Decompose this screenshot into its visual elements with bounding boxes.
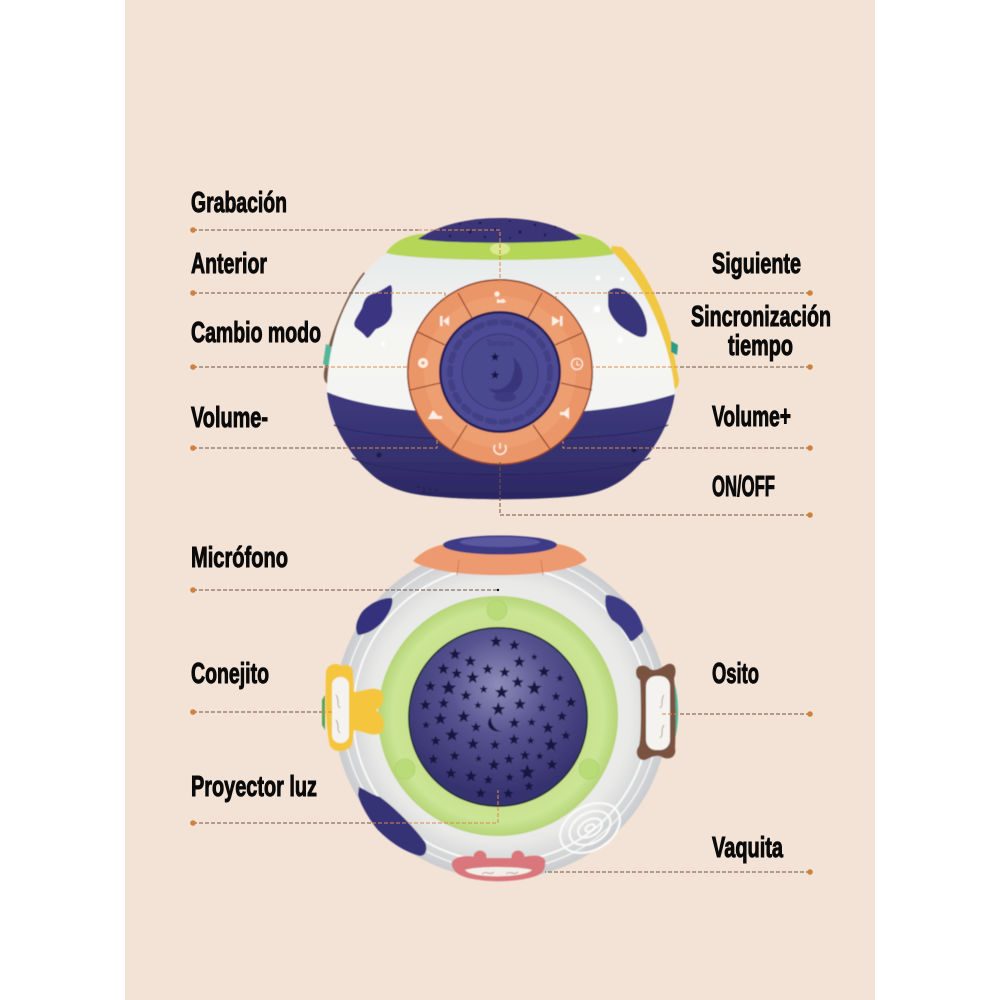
button icon: previous xyxy=(440,316,449,326)
crescent moon emblem xyxy=(488,357,522,395)
green knobs xyxy=(395,600,599,779)
leader line: Conejito xyxy=(190,709,332,715)
beige background panel xyxy=(125,0,875,1000)
label: Vaquita: Vaquita xyxy=(712,832,784,864)
leader line: Sincronización tiempo xyxy=(592,364,813,370)
button icon: volume down xyxy=(428,410,442,419)
label: Micrófono: Micrófono xyxy=(191,542,288,574)
button icon: clock xyxy=(572,358,582,370)
toy: top view with control ring xyxy=(323,218,679,499)
small bumps on white body xyxy=(381,276,624,346)
leader line: Osito xyxy=(661,711,813,717)
label: Anterior: Anterior xyxy=(191,248,267,280)
navy shape bottom left xyxy=(358,787,426,856)
sphere body xyxy=(334,545,668,879)
star dome xyxy=(408,627,588,807)
label: Cambio modo: Cambio modo xyxy=(191,317,321,349)
button icon: volume up xyxy=(560,407,569,419)
control ring xyxy=(407,279,593,465)
speaker holes xyxy=(376,448,636,494)
orange cap xyxy=(413,536,587,575)
yellow bunny frame xyxy=(322,664,384,751)
navy base xyxy=(327,392,675,499)
white body xyxy=(327,252,675,411)
button icon: mode xyxy=(418,358,428,368)
left brown ear and teal tab xyxy=(323,272,368,385)
label: Conejito: Conejito xyxy=(191,658,269,690)
label: Osito: Osito xyxy=(712,658,759,690)
label: Volume-: Volume- xyxy=(191,402,268,434)
label: Sincronización tiempo: tiempo xyxy=(728,330,793,362)
navy center button xyxy=(439,311,561,433)
label: Volume+: Volume+ xyxy=(712,401,791,433)
leader line: Cambio modo xyxy=(190,364,408,370)
button icon: power xyxy=(494,443,506,454)
textured swirl xyxy=(551,793,629,863)
star projector dome xyxy=(418,218,582,243)
label: Sincronización tiempo: Sincronización xyxy=(691,301,831,333)
toy: bottom view with star projector xyxy=(322,536,678,881)
label: Proyector luz: Proyector luz xyxy=(191,771,317,803)
brown bear frame xyxy=(636,664,676,760)
leader line: Proyector luz xyxy=(190,790,498,826)
navy blob top left xyxy=(356,598,392,635)
label: Grabación: Grabación xyxy=(191,187,287,219)
leader line: Vaquita xyxy=(545,869,813,875)
leader line: Micrófono xyxy=(190,587,499,593)
leader line: Siguiente xyxy=(556,290,813,298)
green ring xyxy=(378,596,618,836)
right yellow frame and teal tab xyxy=(610,246,679,389)
green band xyxy=(386,234,614,260)
button icon: next xyxy=(552,316,562,326)
navy blob right xyxy=(608,288,647,337)
leader line: Anterior xyxy=(190,290,445,303)
small stars on button xyxy=(491,352,499,361)
navy star top right xyxy=(605,595,643,641)
label: ON/OFF: ON/OFF xyxy=(712,471,775,503)
brand text: Tomons xyxy=(486,339,514,348)
leader line: Grabación xyxy=(190,227,500,283)
segment dividers xyxy=(410,293,592,449)
label: Sincronización tiempo xyxy=(691,301,831,362)
leader line: Volume+ xyxy=(563,441,813,451)
stars on dome xyxy=(420,635,577,798)
pink cow frame xyxy=(452,850,545,881)
button icon: record xyxy=(494,291,507,303)
navy star shape left xyxy=(354,285,392,338)
leader line: Volume- xyxy=(190,440,437,451)
leader line: ON/OFF xyxy=(500,462,813,518)
label: Siguiente: Siguiente xyxy=(712,248,801,280)
right teal tab behind brown frame xyxy=(664,680,678,744)
